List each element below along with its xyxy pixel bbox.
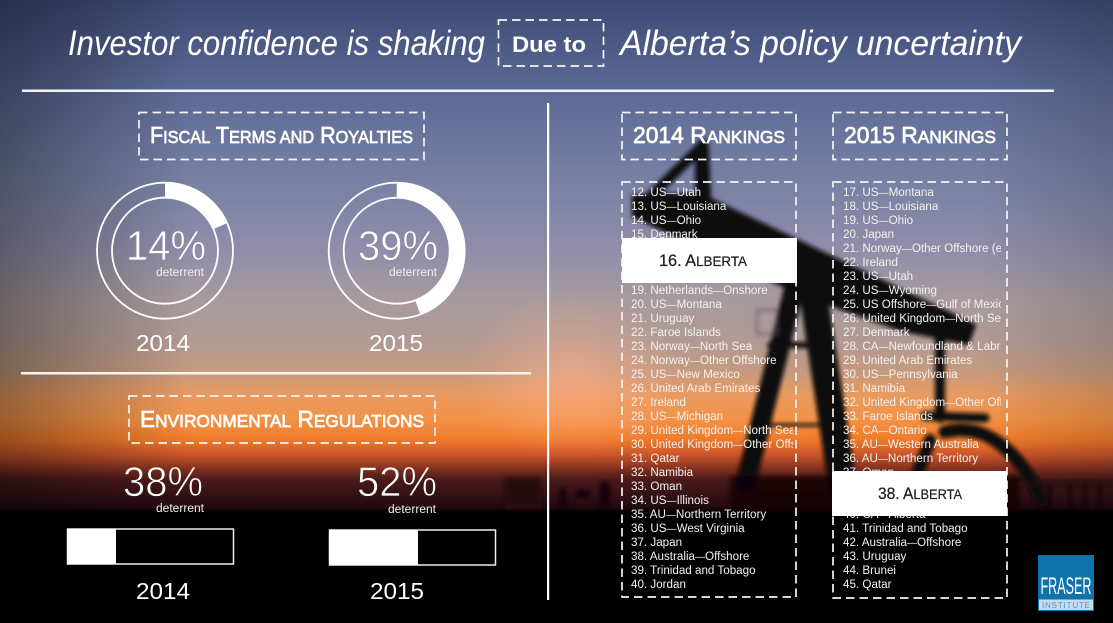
logo: Fraser Institute: INSTITUTE	[1042, 601, 1090, 610]
panel: 2015 ranking list: 21. Norway—Other Offshore (ex	[843, 241, 1008, 255]
bar gauge: 38% deterrent 2014: 2014	[136, 578, 190, 604]
panel: 2014 ranking list: 21. Uruguay	[631, 311, 694, 325]
bar gauge: 52% deterrent 2015	[329, 458, 496, 604]
panel: 2014 ranking list: 30. United Kingdom—Other Offshore	[631, 437, 820, 451]
panel: 2014 ranking list: 23. Norway—North Sea	[631, 339, 753, 353]
panel: 2015 ranking list: 25. US Offshore—Gulf of Mexico	[843, 297, 1011, 311]
bar gauge: 52% deterrent 2015: deterrent	[388, 504, 437, 516]
panel: 2014 ranking list: 36. US—West Virginia	[631, 521, 745, 535]
panel: 2014 ranking list: 27. Ireland	[631, 395, 686, 409]
callout: 16. Alberta: 16. ALBERTA	[659, 251, 748, 270]
panel: 2014 ranking list: 32. Namibia	[631, 465, 693, 479]
background: sun glow	[462, 290, 682, 460]
panel: 2015 ranking list: 24. US—Wyoming	[843, 283, 937, 297]
heading: 2014 rankings: 2014 RANKINGS	[633, 122, 785, 148]
panel: 2015 ranking list: 29. United Arab Emirates	[843, 353, 972, 367]
panel: 2014 ranking list: 14. US—Ohio	[631, 213, 702, 227]
callout: 16. Alberta	[622, 238, 797, 283]
heading: environmental regulations	[129, 396, 435, 443]
panel: 2015 ranking list: 40. CA—Alberta	[843, 507, 926, 521]
heading: fiscal terms and royalties: FISCAL TERMS AND ROYALTIES	[150, 122, 413, 148]
panel: 2014 ranking list: 15. Denmark	[631, 227, 698, 241]
panel: 2014 ranking list: 13. US—Louisiana	[631, 199, 727, 213]
panel: 2015 ranking list: 43. Uruguay	[843, 549, 906, 563]
donut: 14% deterrent 2014: deterrent	[156, 267, 205, 279]
panel: 2014 ranking list: 25. US—New Mexico	[631, 367, 740, 381]
heading: fiscal terms and royalties	[139, 112, 424, 160]
panel: 2015 ranking list: 41. Trinidad and Tobago	[843, 521, 968, 535]
panel: 2014 ranking list: 35. AU—Northern Territory	[631, 507, 766, 521]
bar gauge: 38% deterrent 2014: 38%	[123, 458, 203, 505]
panel: 2015 ranking list: 17. US—Montana	[843, 185, 934, 199]
donut: 39% deterrent 2015	[329, 183, 465, 356]
panel: 2014 ranking list: 12. US—Utah	[631, 185, 701, 199]
panel: 2015 ranking list: 20. Japan	[843, 227, 894, 241]
panel: 2014 ranking list: 33. Oman	[631, 479, 682, 493]
panel: 2014 ranking list: 19. Netherlands—Onshore	[631, 283, 768, 297]
panel: 2015 ranking list: 34. CA—Ontario	[843, 423, 927, 437]
donut: 14% deterrent 2014	[97, 183, 233, 356]
panel: 2015 ranking list: 35. AU—Western Australia	[843, 437, 979, 451]
panel: 2015 ranking list	[832, 181, 1008, 599]
panel: 2014 ranking list: 39. Trinidad and Tobago	[631, 563, 756, 577]
donut: 14% deterrent 2014: 14%	[126, 222, 206, 269]
title divider	[22, 90, 1054, 92]
bar gauge: 38% deterrent 2014	[67, 458, 234, 604]
panel: 2014 ranking list: 24. Norway—Other Offshore	[631, 353, 777, 367]
panel: 2014 ranking list: 26. United Arab Emirates	[631, 381, 760, 395]
panel: 2015 ranking list: 42. Australia—Offshore	[843, 535, 962, 549]
bar gauge: 52% deterrent 2015: 52%	[357, 458, 437, 505]
panel: 2014 ranking list: 20. US—Montana	[631, 297, 722, 311]
panel: 2015 ranking list: 36. AU—Northern Territory	[843, 451, 978, 465]
bar gauge: 52% deterrent 2015: 2015	[370, 578, 424, 604]
panel: 2015 ranking list: 37. Oman	[843, 465, 894, 479]
title	[68, 24, 1023, 63]
centre divider	[547, 103, 549, 600]
donut: 39% deterrent 2015: 2015	[369, 330, 423, 356]
panel: 2014 ranking list: 29. United Kingdom—North Sea	[631, 423, 796, 437]
panel: 2015 ranking list: 26. United Kingdom—North Sea	[843, 311, 1008, 325]
panel: 2015 ranking list: 44. Brunei	[843, 563, 896, 577]
callout: 38. Alberta	[832, 471, 1007, 516]
panel: 2015 ranking list: 28. CA—Newfoundland & Labrador	[843, 339, 1024, 353]
panel: 2015 ranking list: 33. Faroe Islands	[843, 409, 933, 423]
background: oil pumpjack silhouette	[505, 145, 1113, 512]
logo: Fraser Institute	[1038, 555, 1094, 611]
left section divider	[21, 372, 531, 374]
panel: 2015 ranking list: 19. US—Ohio	[843, 213, 914, 227]
panel: 2015 ranking list: 27. Denmark	[843, 325, 910, 339]
panel: 2015 ranking list: 31. Namibia	[843, 381, 905, 395]
panel: 2015 ranking list: 32. United Kingdom—Other Offshore	[843, 395, 1032, 409]
panel: 2014 ranking list: 38. Australia—Offshore	[631, 549, 750, 563]
heading: 2014 rankings	[622, 112, 796, 160]
donut: 14% deterrent 2014: 2014	[136, 330, 190, 356]
panel: 2015 ranking list: 22. Ireland	[843, 255, 898, 269]
panel: 2015 ranking list: 23. US—Utah	[843, 269, 913, 283]
donut: 39% deterrent 2015: 39%	[358, 222, 438, 269]
panel: 2015 ranking list: 18. US—Louisiana	[843, 199, 939, 213]
callout: Due to: Due to	[512, 32, 586, 57]
panel: 2014 ranking list: 37. Japan	[631, 535, 682, 549]
heading: environmental regulations: ENVIRONMENTAL REGULATIONS	[140, 406, 424, 432]
panel: 2014 ranking list	[621, 181, 797, 598]
heading: 2015 rankings: 2015 RANKINGS	[844, 122, 996, 148]
panel: 2015 ranking list: 45. Qatar	[843, 577, 892, 591]
title: Alberta’s policy uncertainty	[618, 24, 1023, 63]
bar gauge: 38% deterrent 2014: deterrent	[156, 503, 205, 515]
panel: 2014 ranking list: 31. Qatar	[631, 451, 680, 465]
callout: 38. Alberta: 38. ALBERTA	[878, 484, 963, 503]
callout: Due to	[498, 20, 604, 66]
panel: 2014 ranking list: 28. US—Michigan	[631, 409, 723, 423]
panel: 2014 ranking list: 22. Faroe Islands	[631, 325, 721, 339]
donut: 39% deterrent 2015: deterrent	[389, 267, 438, 279]
title: Investor confidence is shaking	[68, 24, 485, 63]
panel: 2014 ranking list: 40. Jordan	[631, 577, 686, 591]
heading: 2015 rankings	[833, 112, 1007, 160]
panel: 2015 ranking list: 30. US—Pennsylvania	[843, 367, 958, 381]
panel: 2014 ranking list: 34. US—Illinois	[631, 493, 709, 507]
